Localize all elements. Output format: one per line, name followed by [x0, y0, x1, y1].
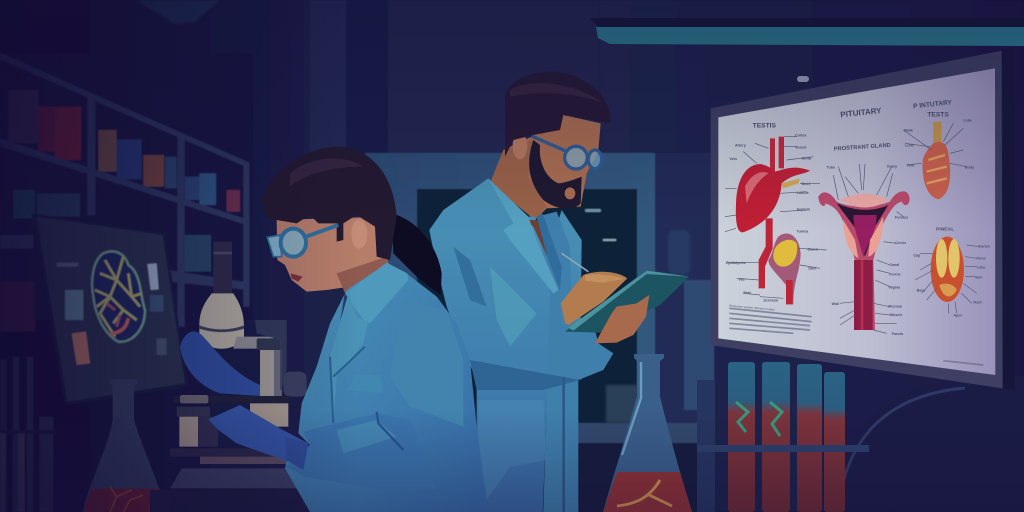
man: glasses: [532, 136, 602, 169]
diagram: label text: Duct: [808, 266, 817, 270]
wall pillar: [310, 0, 598, 160]
right flask with red liquid: [603, 354, 692, 512]
left shelving unit: [0, 53, 253, 332]
diagram: label text: Lobe: [905, 144, 914, 148]
diagram: label text: Lobe: [963, 119, 972, 123]
chart headings: PINEAL: [936, 227, 954, 233]
left test tubes: [0, 357, 57, 512]
man: writing hand: [561, 272, 627, 325]
man: holding hand: [595, 295, 649, 343]
left flask with red liquid: [83, 379, 167, 512]
diagram: label text: Septum: [797, 208, 811, 212]
left monitor with brain scan: [32, 213, 188, 405]
man: neck and face: [490, 115, 601, 220]
diagram: label text: [726, 119, 990, 336]
diagram: label text: Canal: [889, 263, 899, 267]
man: pen: [562, 253, 588, 272]
curved dark machine at right: [835, 376, 1024, 512]
monitor panels: [65, 290, 83, 320]
diagram: label text: Stalk: [904, 129, 914, 133]
man: ear: [513, 133, 527, 159]
woman: glasses: [267, 225, 338, 257]
diagram: label text: Lobe: [977, 265, 985, 269]
man scientist: [429, 71, 689, 512]
diagram: label text: Vessel: [795, 146, 806, 150]
diagram: leader lines: [725, 123, 980, 333]
doorway behind the man: [365, 153, 655, 453]
diagram: label text: Apex: [953, 314, 962, 318]
diagram: label text: Fascia: [892, 332, 904, 336]
diagram: label text: Tube: [827, 165, 835, 169]
woman: lower glove: [208, 405, 308, 462]
microscope: [170, 242, 388, 512]
brain scan: [92, 251, 145, 342]
diagram: label text: Base: [917, 289, 925, 293]
woman and man drawn in shared coordinates: [170, 71, 689, 512]
ceiling lamp left: [135, 0, 220, 24]
diagram: heart: [736, 137, 810, 232]
man: coat shading: [470, 360, 580, 390]
test tube rack: [697, 362, 869, 512]
diagram: label text: Fundus: [895, 215, 908, 219]
diagram: uterus: [818, 191, 910, 330]
diagram: upper testis: [923, 122, 950, 199]
diagram: label text: Fornix: [889, 272, 901, 276]
ceiling lamp right: teal strip: [590, 18, 1024, 82]
diagram: label text: Tunica: [797, 230, 809, 234]
diagram: label text: Cortex: [795, 134, 807, 138]
shelf boards: [0, 53, 249, 327]
woman: ear: [351, 219, 367, 249]
chart headings: PITUITARY: [840, 106, 883, 119]
chart caption block: [729, 308, 983, 365]
chart headings: [753, 99, 954, 233]
man: beard: [529, 140, 582, 209]
diagram: label text: Root: [973, 300, 982, 304]
chart headings: P INTUTARY: [913, 99, 953, 110]
diagram: label text: Muscle: [890, 313, 902, 317]
man: lab coat: [429, 178, 613, 512]
woman: ponytail: [392, 213, 442, 295]
diagram: gland: [759, 218, 801, 304]
man: hair: [505, 71, 611, 157]
diagram: lower organ: [931, 237, 964, 302]
man: tablet: [565, 270, 689, 333]
anatomy chart display: Endocrine system reference notes: [729, 304, 775, 312]
back bench: [576, 385, 701, 512]
woman: upper glove: [180, 331, 260, 396]
diagram: label text: Cortex: [978, 244, 990, 248]
diagram: label text: Ovary: [887, 164, 898, 168]
woman: hair: [262, 147, 397, 260]
diagram: label text: Lobule: [797, 191, 809, 195]
diagram: label text: Vas: [738, 278, 745, 282]
diagram: label text: Wall: [832, 302, 839, 306]
wall equipment right of doorway: [655, 153, 715, 453]
diagram: label text: Aorta: [802, 156, 812, 160]
diagram: label text: Epididymis: [726, 261, 746, 265]
diagram: label text: Vein: [975, 275, 983, 279]
woman: sleeve: [287, 413, 437, 490]
diagram: label text: Rete: [743, 291, 751, 295]
desk: [150, 490, 400, 512]
chart bezel: [1002, 48, 1015, 390]
diagram: label text: Body: [965, 165, 975, 169]
diagram: label text: Vein: [729, 157, 737, 161]
woman scientist: [180, 147, 488, 512]
diagram: label text: Mucosa: [888, 304, 903, 308]
diagram: label text: Cervix: [895, 241, 906, 245]
test tubes: [728, 362, 845, 512]
diagram: label text: Scrotum: [763, 299, 779, 303]
books: top shelf: [0, 90, 240, 332]
diagram: label text: Artery: [735, 144, 747, 148]
anatomy chart display: [711, 48, 1015, 390]
diagram: label text: Cap: [913, 254, 921, 258]
chart headings: TESTIS: [753, 122, 777, 129]
diagram: label text: Gland: [807, 248, 818, 252]
diagram: label text: Duct: [802, 182, 811, 186]
diagram: label text: Vagina: [888, 285, 901, 289]
diagram: label text: Vein: [907, 164, 914, 168]
chart headings: PROSTRANT GLAND: [834, 143, 891, 153]
woman: lab coat: [285, 263, 488, 512]
man: collar: [488, 178, 558, 293]
diagram: label text: Pons: [977, 256, 986, 260]
green streaks: [736, 402, 782, 436]
woman: face and neck: [277, 217, 387, 292]
chart headings: TESTS: [927, 112, 949, 119]
